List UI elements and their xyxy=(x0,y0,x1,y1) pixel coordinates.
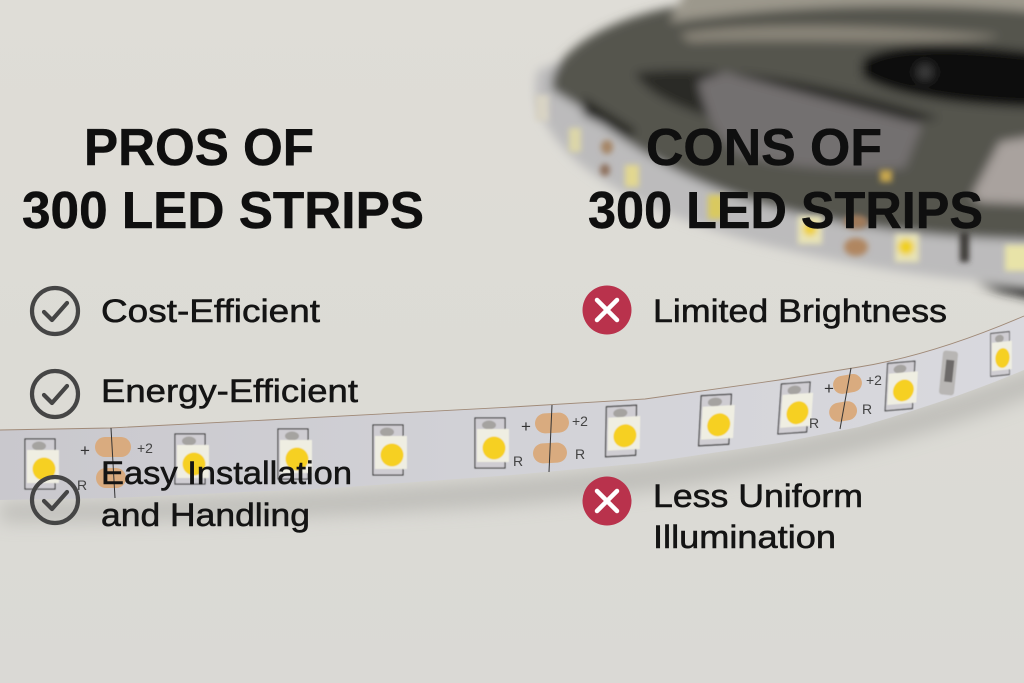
upper lighter rim xyxy=(680,26,1000,42)
pro: cost-efficient: Cost-Efficient xyxy=(101,293,320,329)
heading: cons: CONS OF xyxy=(646,119,882,177)
strip labels: R xyxy=(575,446,585,462)
strip labels: + xyxy=(824,379,834,398)
icon: check energy-efficient xyxy=(32,371,78,417)
heading: pros: 300 LED STRIPS xyxy=(22,182,424,240)
blurred strip LEDs xyxy=(535,95,1024,271)
icon: check easy installation xyxy=(32,477,78,523)
icon: cross less uniform xyxy=(582,476,632,526)
strip labels: +2 xyxy=(866,372,882,388)
con: less uniform illumination: Illumination xyxy=(653,519,836,555)
small resistor xyxy=(939,350,958,396)
cut lines xyxy=(111,368,851,498)
strip band xyxy=(0,316,1024,500)
pro: easy installation: and Handling xyxy=(101,497,310,533)
heading: cons: 300 LED STRIPS xyxy=(588,182,983,240)
dark shadow under upper coil xyxy=(582,97,635,138)
strip labels: R xyxy=(862,401,872,417)
strip top edge xyxy=(0,316,1024,430)
LED strip in foreground xyxy=(0,316,1024,500)
pro: easy installation xyxy=(101,455,352,533)
reel strip outer band xyxy=(535,40,1024,285)
strip soft shadow xyxy=(0,358,1024,522)
strip labels: +2 xyxy=(572,413,588,429)
solder pads xyxy=(95,373,863,488)
heading: pros xyxy=(22,119,424,240)
top beige rim xyxy=(670,0,1024,22)
black hole xyxy=(862,45,1024,108)
strip labels: R xyxy=(513,453,523,469)
inner coil patch xyxy=(698,72,922,169)
heading: pros: PROS OF xyxy=(84,119,314,177)
pro: energy-efficient: Energy-Efficient xyxy=(101,373,358,409)
con: less uniform illumination: Less Uniform xyxy=(653,478,863,514)
strip labels: R xyxy=(809,415,819,431)
dark band bottom xyxy=(975,282,1024,305)
heading: cons xyxy=(588,119,983,240)
light label patch xyxy=(972,132,1024,205)
blurred LED reel xyxy=(535,0,1024,305)
LEDs xyxy=(25,331,1012,489)
con: limited brightness: Limited Brightness xyxy=(653,293,947,329)
strip labels: + xyxy=(521,417,531,436)
strip labels xyxy=(77,372,882,493)
dark reel body xyxy=(552,0,1024,240)
icon: cross limited brightness xyxy=(582,286,632,334)
icon: check cost-efficient xyxy=(32,288,78,334)
con: less uniform illumination xyxy=(653,478,863,555)
strip labels: +2 xyxy=(137,440,153,456)
strip labels: R xyxy=(77,477,87,493)
pro: easy installation: Easy Installation xyxy=(101,455,352,491)
strip labels: + xyxy=(80,441,90,460)
